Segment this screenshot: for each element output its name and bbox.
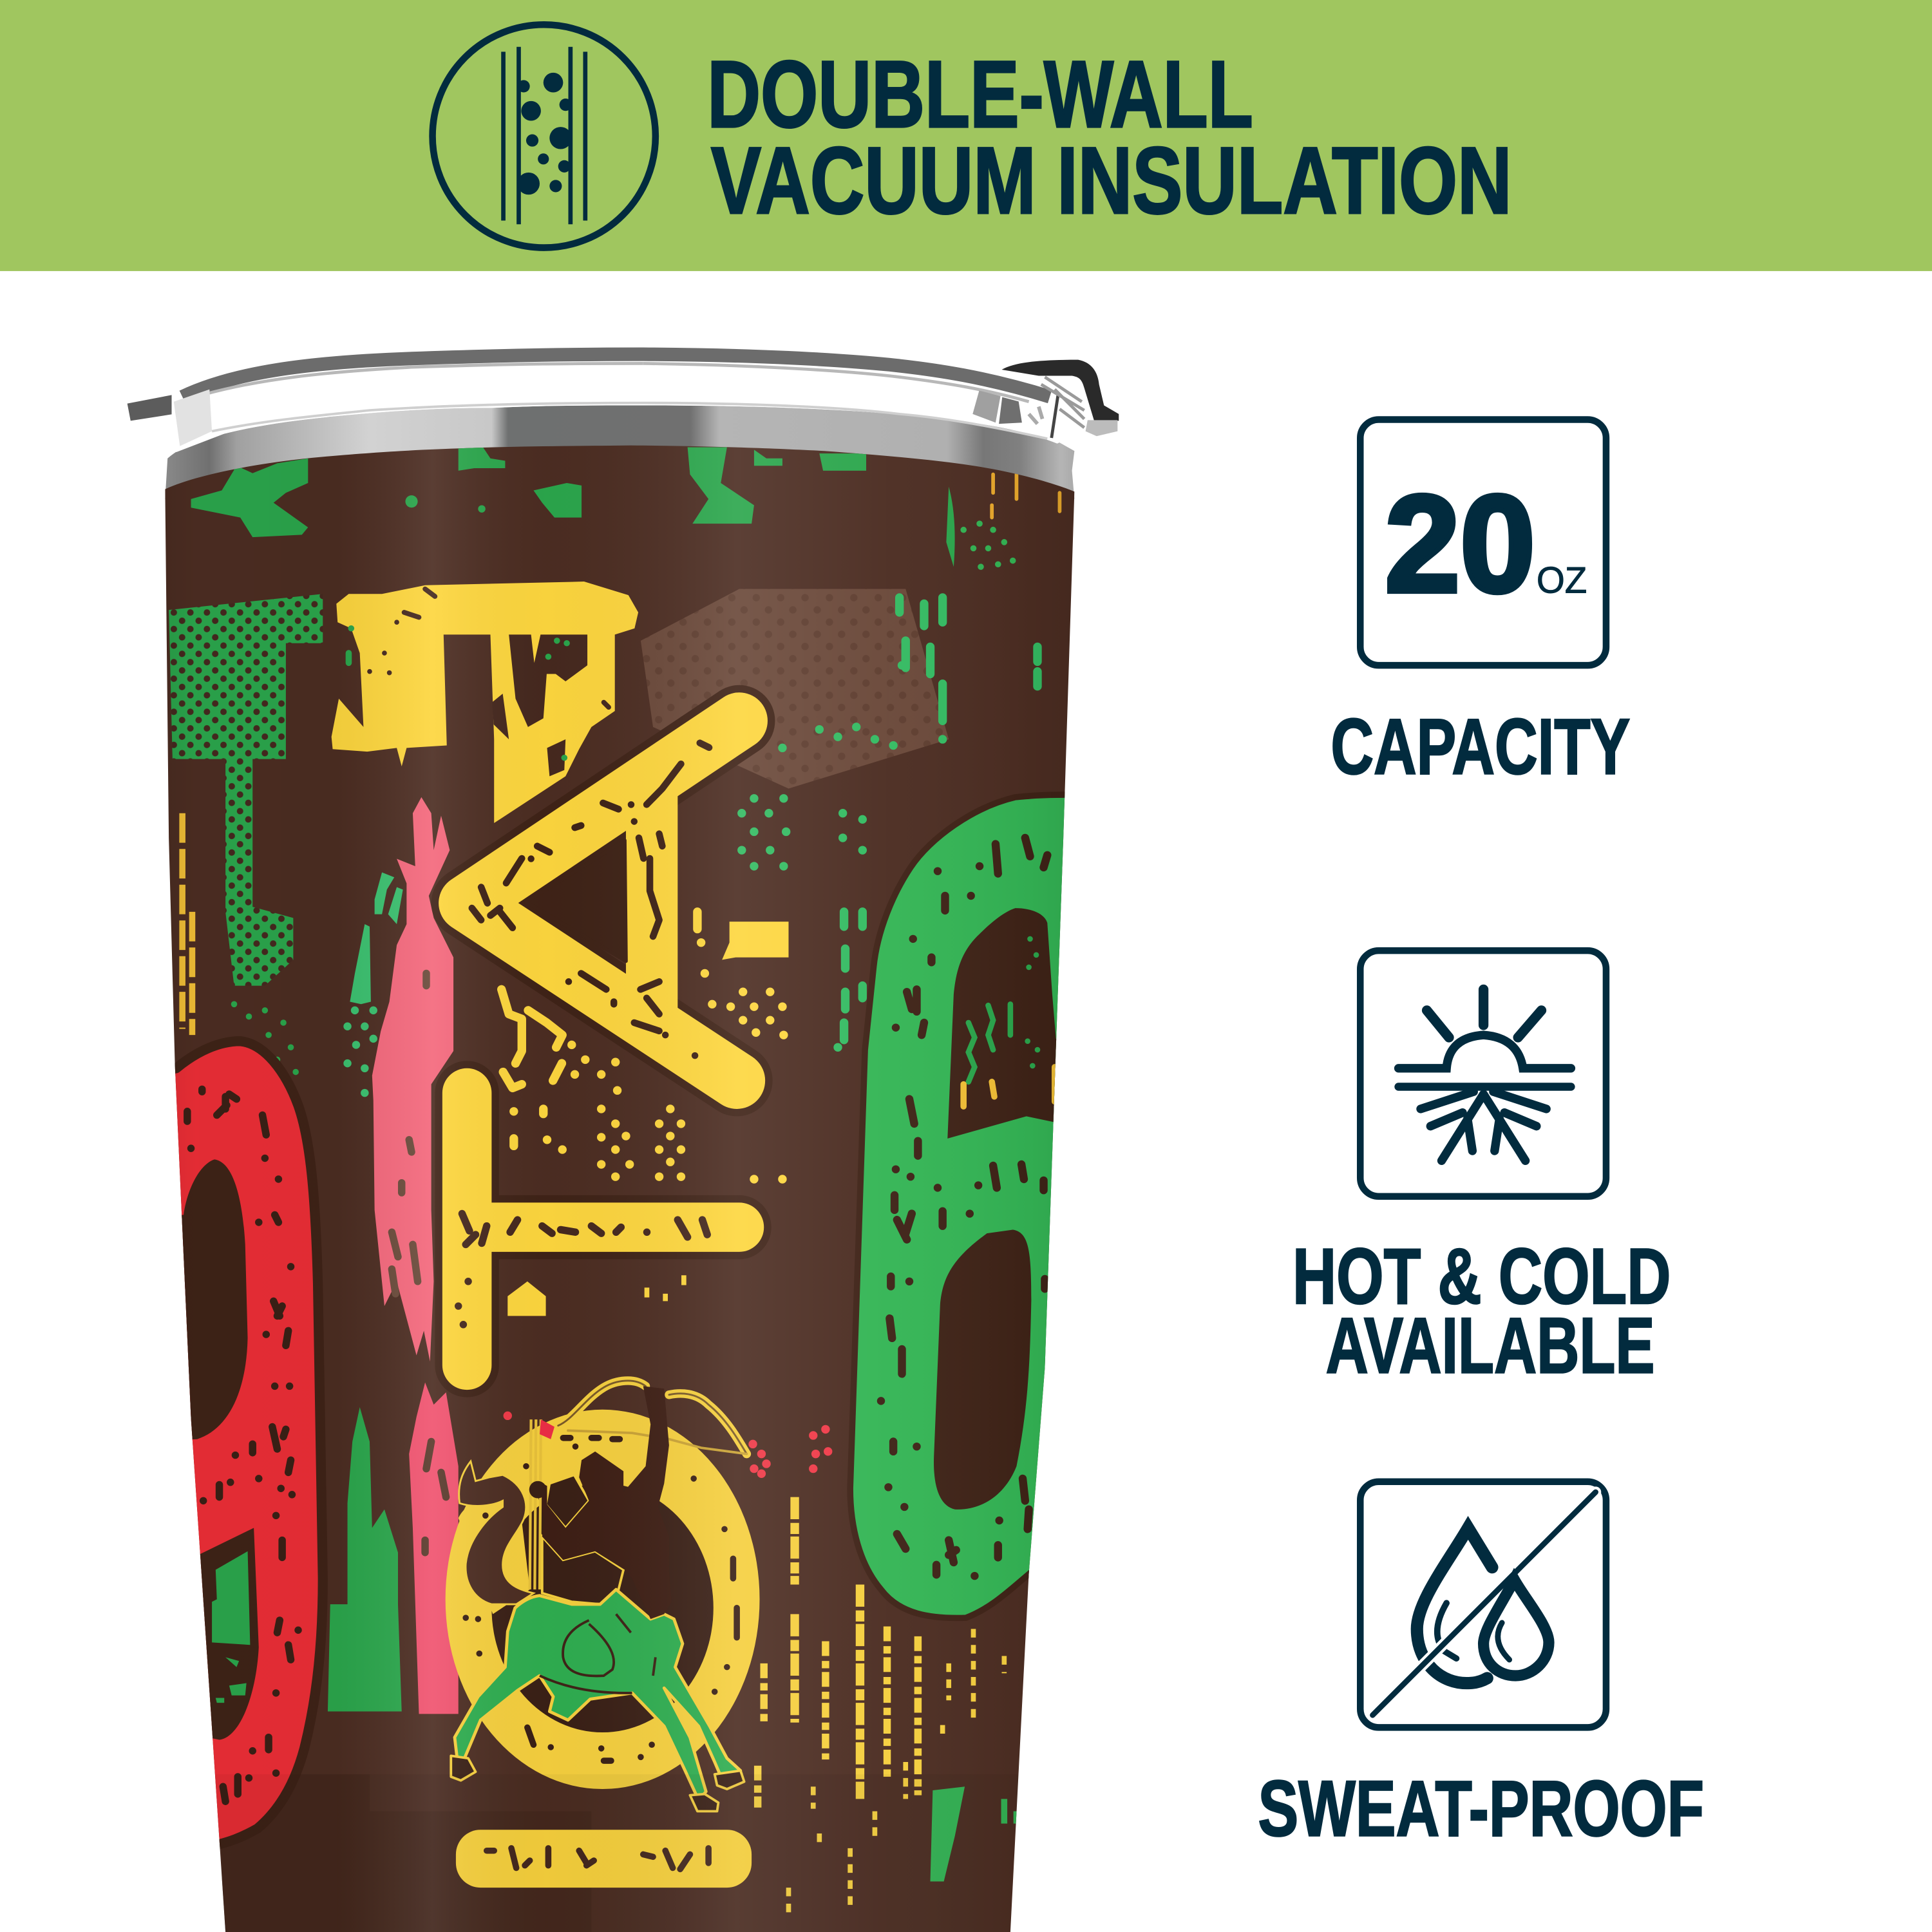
red numeral 9 bbox=[148, 1041, 323, 1848]
lid left clear section bbox=[174, 390, 212, 446]
label: capacity: CAPACITY bbox=[1331, 703, 1630, 791]
lid tab right bbox=[1001, 360, 1119, 421]
lid latch metal bbox=[972, 377, 1117, 438]
light green drip strip bbox=[350, 873, 403, 1004]
tumbler product photo bbox=[128, 345, 1119, 1932]
lid rim bbox=[182, 354, 1050, 397]
lid edge above steel bbox=[212, 403, 1047, 439]
heading: VACUUM INSULATION bbox=[711, 128, 1512, 234]
label: hot and cold available: HOT & COLD bbox=[1293, 1232, 1671, 1320]
horse hooves bbox=[451, 1756, 744, 1811]
icon: crossed out water drops bbox=[1360, 1482, 1606, 1727]
icon: sun and snowflake bbox=[1360, 951, 1606, 1197]
centaur tail bbox=[459, 1461, 533, 1604]
feature: hot and cold bbox=[1293, 951, 1671, 1389]
label: sweat-proof: SWEAT-PROOF bbox=[1258, 1765, 1704, 1853]
icon: 20 oz box: 20 bbox=[1385, 467, 1535, 621]
heading bbox=[707, 42, 1512, 234]
emblem hole bbox=[491, 1484, 714, 1732]
steel rim band bbox=[165, 405, 1074, 499]
arrow bbox=[530, 1419, 541, 1589]
centaur emblem bbox=[446, 1381, 760, 1811]
yellow T shape bbox=[459, 1093, 739, 1365]
yellow above torso bbox=[459, 1448, 641, 1614]
green drip lower right bbox=[931, 1786, 965, 1882]
green stripe lower bbox=[328, 1407, 402, 1712]
yellow splatter drips bbox=[758, 1497, 1004, 1912]
dark window left of torso bbox=[542, 1475, 623, 1604]
header banner bbox=[0, 0, 1932, 271]
centaur horse body bbox=[455, 1589, 741, 1800]
centaur torso bbox=[531, 1386, 672, 1619]
feature: sweat-proof bbox=[1258, 1482, 1704, 1853]
label: hot and cold available bbox=[1293, 1232, 1671, 1389]
yellow small tab bbox=[722, 922, 788, 960]
heading: DOUBLE-WALL bbox=[707, 42, 1253, 147]
green texture top bbox=[191, 448, 1013, 567]
faint halftone patch bbox=[641, 589, 949, 788]
yellow distressed block bbox=[332, 582, 638, 823]
yellow halftone dots bbox=[514, 912, 784, 1179]
green dots bbox=[742, 598, 1037, 1047]
icon: double-wall insulation circle bbox=[433, 24, 656, 248]
label: hot and cold available: AVAILABLE bbox=[1326, 1301, 1655, 1389]
cylinder shading bbox=[148, 394, 1097, 1932]
feature: capacity bbox=[1331, 419, 1630, 791]
pink stripe lower bbox=[409, 1383, 459, 1714]
bow bbox=[558, 1381, 746, 1454]
yellow pill bbox=[456, 1830, 752, 1888]
green halftone T bbox=[169, 594, 323, 986]
lid tab left bbox=[128, 395, 172, 421]
yellow triangular letter A bbox=[467, 721, 739, 1081]
green numeral 6 bbox=[850, 795, 1084, 1618]
horse muscle lines bbox=[540, 1614, 656, 1693]
icon: 20 oz box: OZ bbox=[1537, 560, 1587, 601]
yellow small house block bbox=[507, 1274, 546, 1316]
tumbler body with print bbox=[148, 394, 1097, 1932]
icon: 20 oz box bbox=[1360, 419, 1606, 665]
emblem ring bbox=[446, 1410, 760, 1789]
pink stripe upper bbox=[372, 797, 453, 1361]
red dots near emblem bbox=[507, 1416, 828, 1473]
yellow left edge strip bbox=[182, 813, 192, 1035]
clear lid bbox=[128, 345, 1119, 452]
